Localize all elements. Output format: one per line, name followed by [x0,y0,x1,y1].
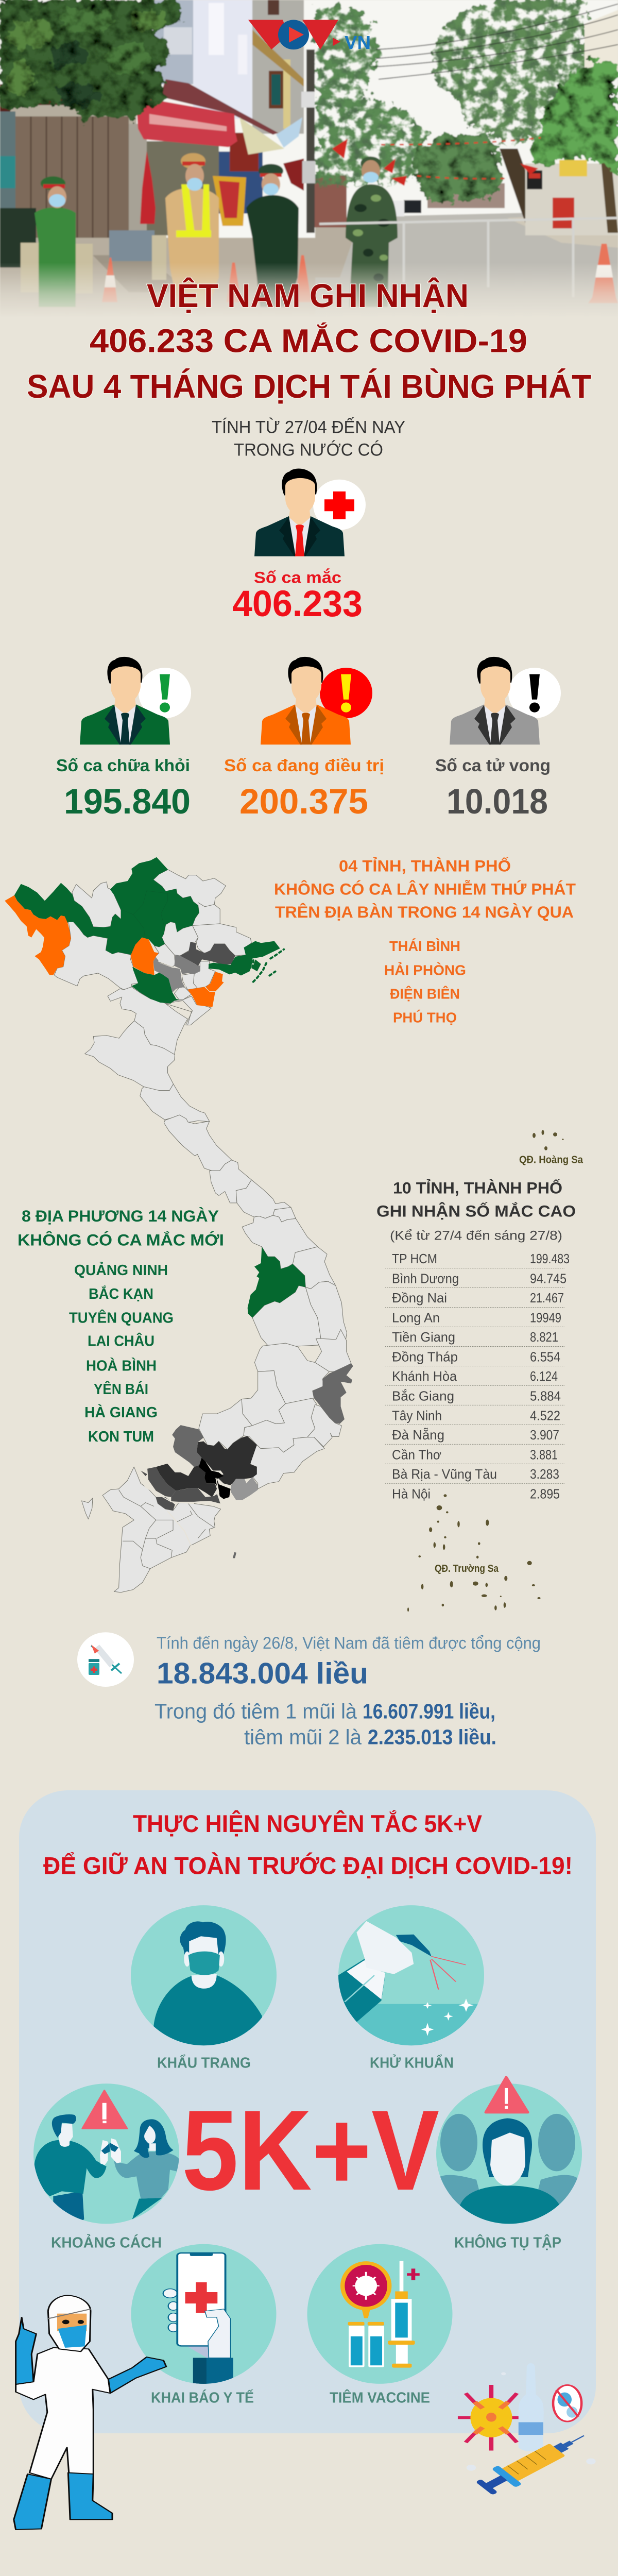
rows: Bà Rịa - Vũng Tàu [392,1467,497,1482]
label: Số ca mắc [254,568,341,587]
province list: HẢI PHÒNG [384,962,466,978]
stat: deaths [435,657,561,821]
islands: Hoàng Sa [533,1130,563,1150]
text: second dose: 2.235.013 liều. [368,1725,496,1749]
map label: Hoàng Sa: QĐ. Hoàng Sa [519,1154,583,1166]
icon: disinfection spray [337,1905,487,2047]
people [35,208,76,307]
province list [384,939,466,1026]
heading [376,1178,576,1220]
province list: HOÀ BÌNH [86,1357,157,1374]
stat: recovered [56,657,191,821]
logo: VOV.VN: VN [345,32,371,53]
rows: Đồng Tháp [392,1349,458,1364]
province list: BẮC KẠN [89,1285,153,1302]
rows: Tây Ninh [392,1408,442,1423]
heading: GHI NHẬN SỐ MẮC CAO [376,1201,576,1220]
heading: TRÊN ĐỊA BÀN TRONG 14 NGÀY QUA [275,902,574,921]
map: central provinces [164,1115,347,1347]
number: 195.840 [64,782,191,821]
title: 406.233 CA MẮC COVID-19 [90,323,527,359]
rows: 3.881 [530,1447,558,1463]
rows: 8.821 [530,1329,558,1345]
title [27,277,591,405]
rows: Bắc Giang [392,1388,454,1403]
note: (Kể từ 27/4 đến sáng 27/8) [390,1229,562,1243]
number: 200.375 [239,782,368,821]
title: VIỆT NAM GHI NHẬN [147,277,469,314]
panel heading: ĐỂ GIỮ AN TOÀN TRƯỚC ĐẠI DỊCH COVID-19! [43,1852,573,1879]
vaccination section [77,1632,541,1749]
subtitle: TÍNH TỪ 27/04 ĐẾN NAY [212,417,405,437]
rows: 94.745 [530,1271,566,1286]
panel heading [43,1810,573,1879]
subtitle [212,417,405,460]
icon: syringe and bottle [77,1632,134,1687]
rows: 19949 [530,1310,561,1325]
subtitle: TRONG NƯỚC CÓ [234,440,383,460]
map: northern provinces [5,857,284,1123]
rows: Khánh Hòa [392,1368,457,1384]
text: second dose: tiêm mũi 2 là [244,1725,362,1749]
icon: grey person [450,657,561,744]
province list: ĐIỆN BIÊN [390,986,460,1002]
rows: 6.124 [530,1368,558,1384]
callout: 8 localities without new cases [18,1207,224,1445]
map label: Trường Sa: QĐ. Trường Sa [435,1563,499,1574]
icon: face mask [131,1905,277,2046]
illustration: virus, ampoule and syringe [458,2363,596,2498]
big 5K+V: 5K+V [182,2087,439,2214]
rows: Hà Nội [392,1486,431,1502]
text: first dose: Trong đó tiêm 1 mũi là [154,1700,357,1723]
province list: HÀ GIANG [84,1403,158,1421]
logo: VOV.VN [248,20,371,53]
province list: THÁI BÌNH [389,939,460,955]
rows [392,1251,570,1502]
province list: KON TUM [88,1429,154,1445]
barriers and cones [319,218,618,297]
stat: total cases [232,468,366,624]
heading: KHÔNG CÓ CA MẮC MỚI [18,1230,224,1249]
map: southern provinces [81,1329,353,1592]
text: second dose [244,1725,496,1749]
heading [18,1207,224,1249]
label: Số ca tử vong [435,756,551,775]
label: KHÔNG TỤ TẬP [454,2234,561,2251]
text: total doses: Tính đến ngày 26/8, Việt Nam đã tiêm được tổng cộng [157,1634,541,1653]
rows: 4.522 [530,1408,560,1423]
icon: keep distance [33,2083,179,2226]
label: KHOẢNG CÁCH [51,2234,162,2251]
icon: green person [80,657,191,744]
label: Số ca chữa khỏi [56,756,190,775]
rows: 3.283 [530,1467,559,1482]
heading: 8 ĐỊA PHƯƠNG 14 NGÀY [22,1207,219,1225]
panel: 5K+V [19,1790,596,2433]
rows: 3.907 [530,1428,559,1443]
icon: no gathering [435,2077,582,2229]
rows: 199.483 [530,1251,570,1266]
islands: Trường Sa [407,1494,541,1612]
rows: Tiền Giang [392,1329,455,1345]
number: 406.233 [232,583,363,624]
text: first dose: 16.607.991 liều, [363,1700,495,1723]
text: first dose [154,1700,495,1723]
rows: Đồng Nai [392,1290,447,1306]
icon: health declaration [131,2244,276,2384]
province list: YÊN BÁI [94,1380,148,1398]
right side scene [315,211,618,317]
rows: Bình Dương [392,1271,459,1286]
rows: 5.884 [530,1388,561,1403]
rows: Long An [392,1310,440,1325]
label: TIÊM VACCINE [330,2389,430,2406]
rows: 6.554 [530,1349,560,1364]
icon: vaccine [307,2244,452,2384]
label: KHAI BÁO Y TẾ [151,2389,254,2406]
rows: 2.895 [530,1486,560,1502]
hero photo: checkpoint street [0,0,618,318]
rows: Đà Nẵng [392,1428,444,1443]
number: doses: 18.843.004 liều [157,1657,368,1690]
icon: person with red cross [254,468,366,556]
title: SAU 4 THÁNG DỊCH TÁI BÙNG PHÁT [27,368,591,405]
rows: Cần Thơ [392,1447,441,1463]
icon: orange person [261,657,372,744]
province list: PHÚ THỌ [393,1010,457,1026]
heading: KHÔNG CÓ CA LÂY NHIỄM THỨ PHÁT [274,879,576,898]
heading: 04 TỈNH, THÀNH PHỐ [339,856,511,875]
rows: TP HCM [392,1251,437,1266]
callout: 4 provinces without secondary infection [274,856,576,1026]
label: KHỬ KHUẨN [370,2054,454,2071]
heading: 10 TỈNH, THÀNH PHỐ [393,1178,562,1197]
province list: QUẢNG NINH [74,1262,168,1279]
province list [69,1262,174,1445]
warning triangle [486,2077,528,2112]
stat: under treatment [224,657,384,821]
label: KHẨU TRANG [157,2054,251,2071]
panel heading: THỰC HIỆN NGUYÊN TẮC 5K+V [133,1810,482,1838]
rows: 21.467 [530,1290,564,1306]
province list: LAI CHÂU [88,1332,154,1349]
heading [274,856,576,921]
figure: medic in protective suit [14,2295,166,2530]
label: Số ca đang điều trị [224,756,384,775]
province list: TUYÊN QUANG [69,1309,174,1326]
number: 10.018 [447,782,548,821]
table: top provinces by cases [376,1178,576,1502]
map of Vietnam [5,857,563,1612]
left tree [0,0,184,119]
